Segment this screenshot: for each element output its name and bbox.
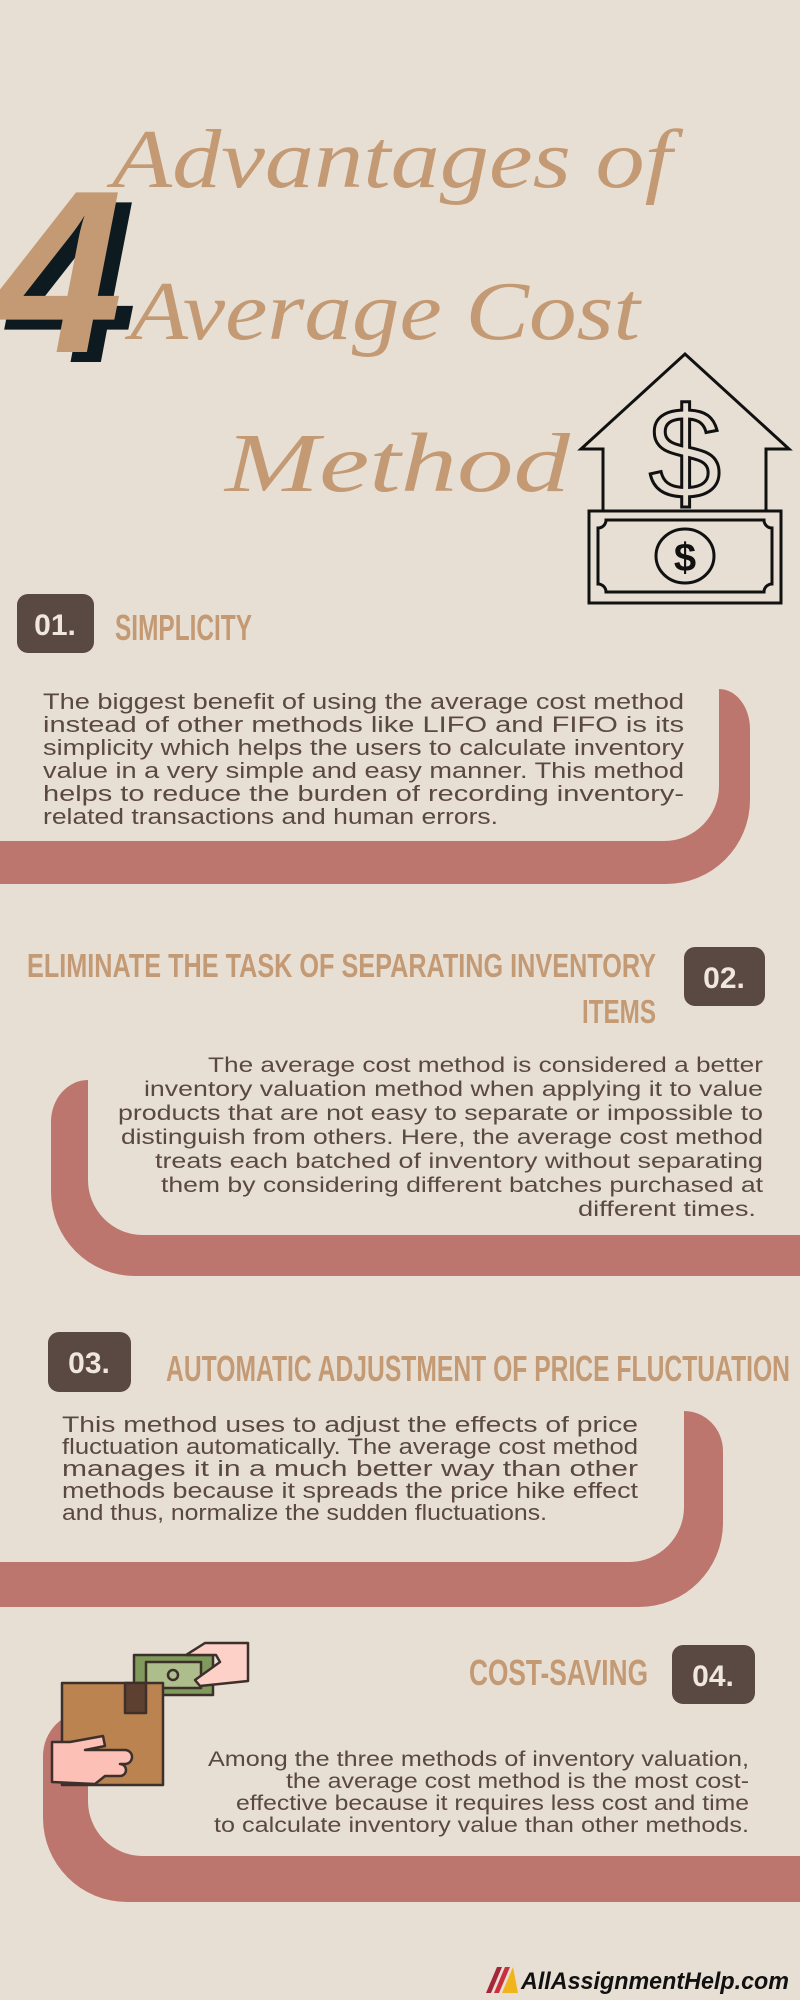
badge 04: [672, 1645, 755, 1704]
panel: band 2: [51, 1080, 800, 1276]
text block 3: methods because it spreads the price hike effect: [62, 1478, 638, 1503]
icon: box and money exchange: [52, 1643, 248, 1785]
heading: eliminate separating: [27, 947, 656, 1030]
text block 3: This method uses to adjust the effects of price: [62, 1412, 638, 1437]
heading: eliminate separating: ITEMS: [582, 993, 656, 1030]
text block 4: [208, 1748, 749, 1837]
badge 02: 02.: [703, 962, 745, 995]
text block 3: manages it in a much better way than other: [62, 1456, 638, 1481]
text block 4: effective because it requires less cost and time: [236, 1792, 749, 1815]
badge 03: [48, 1332, 131, 1392]
badge 04: 04.: [692, 1660, 734, 1693]
text block 3: and thus, normalize the sudden fluctuations.: [62, 1500, 547, 1525]
badge 01: 01.: [34, 609, 76, 642]
badge 01: [17, 594, 94, 653]
badge 02: [684, 947, 765, 1006]
text block 2: distinguish from others. Here, the average cost method: [121, 1126, 763, 1149]
text block 1: [43, 689, 684, 829]
text block 1: simplicity which helps the users to calculate inventory: [43, 735, 684, 760]
text block 1: value in a very simple and easy manner. This method: [43, 758, 684, 783]
text block 2: [118, 1054, 763, 1221]
heading: simplicity: SIMPLICITY: [115, 607, 252, 648]
title: Average Cost: [124, 265, 643, 358]
text block 2: products that are not easy to separate or impossible to: [118, 1102, 763, 1125]
title: [106, 113, 684, 510]
icon: house with dollar: $: [649, 380, 721, 526]
text block 4: to calculate inventory value than other methods.: [214, 1814, 749, 1837]
panel: band 3: [0, 1411, 723, 1607]
icon: house with dollar: $: [674, 536, 696, 580]
text block 1: related transactions and human errors.: [43, 804, 498, 829]
text block 1: The biggest benefit of using the average cost method: [43, 689, 684, 714]
title number 4: 4: [4, 153, 137, 412]
text block 2: different times.: [578, 1198, 756, 1221]
icon: house with dollar: [581, 354, 789, 603]
text block 2: them by considering different batches purchased at: [161, 1174, 763, 1197]
heading: cost-saving: COST-SAVING: [469, 1652, 648, 1693]
text block 2: The average cost method is considered a better: [208, 1054, 763, 1077]
text block 3: [62, 1412, 638, 1525]
text block 3: fluctuation automatically. The average cost method: [62, 1434, 638, 1459]
text block 2: inventory valuation method when applying it to value: [144, 1078, 763, 1101]
badge 03: 03.: [68, 1347, 110, 1380]
text block 4: Among the three methods of inventory valuation,: [208, 1748, 749, 1771]
title: Advantages of: [106, 113, 684, 206]
text block 1: helps to reduce the burden of recording inventory-: [43, 781, 684, 806]
title: Method: [224, 417, 571, 510]
panel: band 1: [0, 689, 750, 884]
text block 2: treats each batched of inventory without separating: [155, 1150, 763, 1173]
panel: band 4: [43, 1711, 800, 1902]
logo: AllAssignmentHelp.com: [520, 1968, 789, 1995]
text block 1: instead of other methods like LIFO and FIFO is its: [43, 712, 684, 737]
text block 4: the average cost method is the most cost-: [286, 1770, 749, 1793]
